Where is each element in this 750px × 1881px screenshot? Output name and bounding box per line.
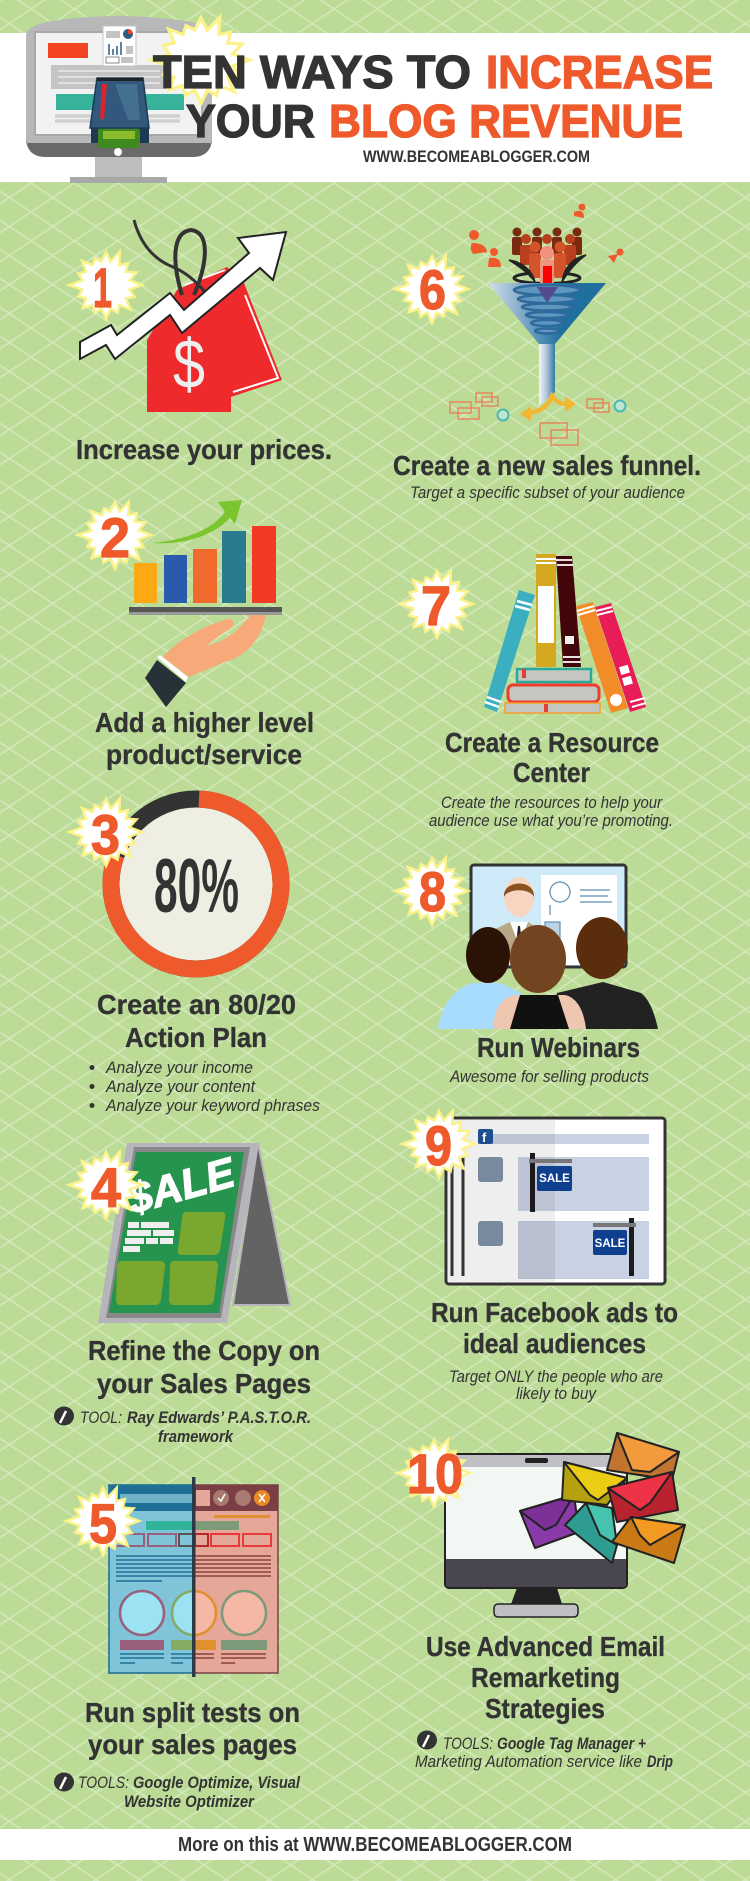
subtext 9	[449, 1367, 663, 1403]
panel 3: 80/20 plan	[69, 796, 320, 1115]
heading 2: Add a higher level	[95, 707, 314, 738]
tool note 10: Google Tag Manager +	[497, 1734, 646, 1753]
heading 6: Create a new sales funnel.	[393, 450, 701, 481]
header starburst	[151, 17, 250, 104]
panel 10: email remarketing	[397, 1433, 685, 1771]
badge 8: 8	[419, 860, 446, 923]
heading 4: your Sales Pages	[97, 1368, 311, 1399]
badge 2	[78, 502, 151, 569]
heading 5: Run split tests on	[85, 1697, 300, 1728]
tool note 4: TOOL:	[80, 1408, 122, 1427]
badge 2: 2	[100, 506, 130, 569]
chart: 80 percent ring: 80%	[154, 844, 239, 929]
heading 9: Run Facebook ads to	[431, 1297, 678, 1328]
tool note 10: Marketing Automation service like	[415, 1752, 642, 1771]
badge 3	[69, 799, 142, 866]
heading 8: Run Webinars	[477, 1032, 640, 1063]
title: YOUR	[186, 95, 315, 147]
icon: sale sandwich board: $ALE	[122, 1148, 241, 1223]
heading 10: Use Advanced Email	[426, 1631, 665, 1662]
heading 2: product/service	[106, 739, 302, 770]
title: BLOG REVENUE	[329, 95, 683, 147]
badge 5: 5	[89, 1492, 117, 1555]
heading 7: Create a Resource	[445, 727, 659, 758]
badge 10: 10	[407, 1442, 463, 1505]
subtext 9: likely to buy	[516, 1384, 597, 1403]
icon: price tag with arrow: $	[173, 325, 205, 403]
heading 3: Create an 80/20	[97, 989, 296, 1020]
bullet list 3: Analyze your content	[105, 1077, 256, 1096]
bullet list 3: Analyze your keyword phrases	[105, 1096, 320, 1115]
icon: wrench 10	[417, 1730, 437, 1750]
panel 4: refine copy	[54, 1143, 320, 1446]
badge 7: 7	[421, 574, 451, 637]
panel 8: webinars	[395, 858, 658, 1086]
badge 9	[402, 1111, 475, 1178]
subtext 9: Target ONLY the people who are	[449, 1367, 663, 1386]
badge 4	[69, 1152, 142, 1219]
tool note 10	[415, 1734, 673, 1771]
panel 6: sales funnel	[393, 204, 701, 502]
tool note 4	[80, 1408, 311, 1446]
tool note 4: Ray Edwards’ P.A.S.T.O.R.	[127, 1408, 311, 1427]
badge 6: 6	[419, 258, 446, 321]
tool note 5: Website Optimizer	[124, 1792, 255, 1811]
title: TEN WAYS TO	[153, 46, 471, 98]
icon: facebook feed with sale signs: SALE	[595, 1238, 626, 1250]
icon: webinar audience	[438, 865, 658, 1029]
panel 7: resource center	[400, 554, 673, 830]
icon: wrench 5	[54, 1772, 74, 1792]
icon: funnel	[450, 204, 626, 445]
icon: sale sandwich board	[98, 1143, 290, 1323]
heading 10	[426, 1631, 665, 1724]
heading 9: ideal audiences	[463, 1328, 646, 1359]
panel 9: facebook ads	[402, 1111, 678, 1403]
bullet list 3: Analyze your income	[105, 1058, 253, 1077]
badge 6	[395, 256, 468, 323]
tool note 5: TOOLS:	[78, 1773, 129, 1792]
tool note 4: framework	[158, 1427, 234, 1446]
title	[153, 46, 713, 147]
heading 4: Refine the Copy on	[88, 1335, 320, 1366]
tool note 5: Google Optimize, Visual	[133, 1773, 301, 1792]
heading 3: Action Plan	[125, 1022, 267, 1053]
heading 7: Center	[513, 757, 590, 788]
heading 10: Remarketing	[471, 1662, 620, 1693]
subtext 6: Target a specific subset of your audience	[410, 483, 685, 502]
icon: split test page	[109, 1477, 278, 1677]
badge 7	[400, 571, 473, 638]
heading 5	[85, 1697, 300, 1760]
subtext 7: audience use what you’re promoting.	[429, 811, 673, 830]
heading 4	[88, 1335, 320, 1399]
heading 5: your sales pages	[88, 1729, 297, 1760]
icon: wrench 4	[54, 1406, 74, 1426]
badge 8	[395, 858, 468, 925]
badge 1: 1	[93, 256, 112, 319]
chart: 80 percent ring	[108, 796, 284, 972]
panel 2: higher level product	[78, 500, 314, 770]
icon: facebook feed with sale signs: f	[482, 1130, 487, 1145]
bullet list 3	[90, 1058, 320, 1115]
header url: WWW.BECOMEABLOGGER.COM	[363, 148, 590, 166]
tool note 10: Drip	[647, 1752, 673, 1771]
badge 4: 4	[91, 1156, 121, 1219]
footer band: More on this at WWW.BECOMEABLOGGER.COM	[178, 1834, 572, 1856]
icon: books	[484, 554, 646, 713]
panel 1: increase prices	[69, 220, 332, 465]
icon: facebook feed with sale signs: SALE	[539, 1173, 570, 1185]
icon: price tag with arrow	[80, 220, 286, 412]
heading 7	[445, 727, 659, 788]
subtext 8: Awesome for selling products	[449, 1067, 649, 1086]
heading 2	[95, 707, 314, 770]
subtext 7: Create the resources to help your	[441, 793, 663, 812]
icon: monitor with envelopes	[445, 1433, 685, 1617]
heading 9	[431, 1297, 678, 1359]
heading 3	[97, 989, 296, 1053]
badge 9: 9	[425, 1114, 452, 1177]
badge 5	[66, 1488, 139, 1555]
footer band	[0, 1829, 750, 1860]
title: INCREASE	[486, 46, 713, 98]
tool note 5	[78, 1773, 301, 1811]
badge 1	[69, 252, 142, 319]
panel 5: split tests	[54, 1477, 301, 1811]
icon: monitor with wallet	[26, 16, 212, 183]
badge 3: 3	[91, 803, 120, 866]
header band	[0, 33, 750, 182]
heading 1: Increase your prices.	[76, 434, 332, 465]
subtext 7	[429, 793, 673, 830]
icon: facebook feed with sale signs	[446, 1118, 665, 1284]
tool note 10: TOOLS:	[443, 1734, 493, 1753]
heading 10: Strategies	[485, 1693, 605, 1724]
icon: bar chart on tray held by hand	[129, 500, 282, 707]
